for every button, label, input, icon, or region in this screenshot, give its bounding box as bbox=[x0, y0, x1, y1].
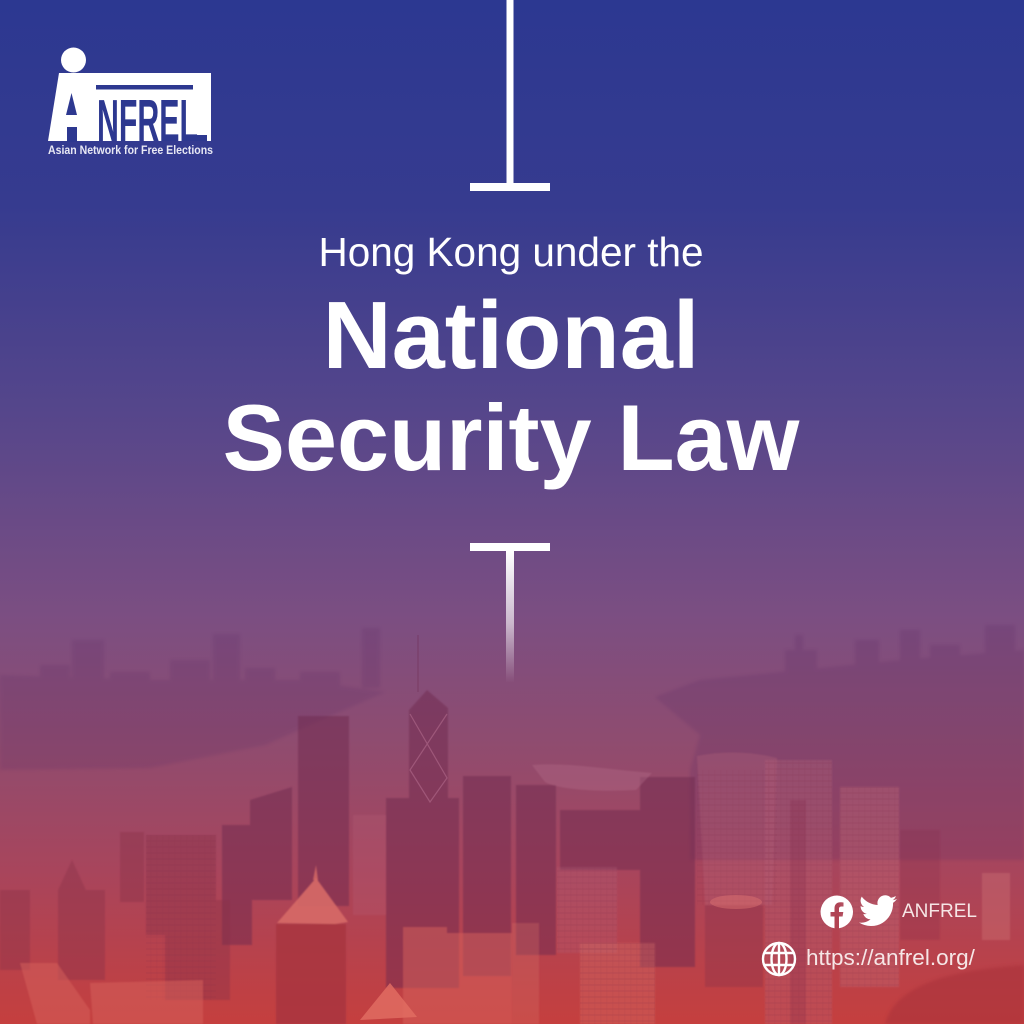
right hand residential towers bbox=[512, 752, 1010, 1024]
logo: ANFREL: Asian Network for Free Elections bbox=[48, 143, 213, 157]
title line 3: Security Law bbox=[223, 385, 799, 490]
social: twitter bird icon bbox=[859, 895, 897, 926]
pyramid roof building bbox=[276, 865, 348, 1024]
bottom vertical line with cap and fade bbox=[470, 543, 550, 678]
website url: https://anfrel.org/ bbox=[806, 945, 975, 970]
foreground pale rooftops bbox=[20, 927, 512, 1024]
far shore city right bbox=[655, 625, 1024, 860]
pale building, centre bbox=[353, 815, 386, 915]
top vertical line with cap bbox=[470, 0, 550, 191]
title line 1: Hong Kong under the bbox=[318, 229, 704, 275]
round tower roof bbox=[710, 895, 762, 909]
mid-ground buildings left bbox=[0, 832, 230, 1000]
logo: ANFREL bbox=[48, 48, 213, 157]
Bank of China mast bbox=[417, 635, 419, 692]
dark foliage bbox=[885, 965, 1024, 1024]
icon: globe bbox=[762, 942, 796, 976]
convention centre roof bbox=[532, 764, 652, 791]
window grid texture bbox=[146, 760, 899, 1024]
foreground pyramid roof bbox=[360, 983, 417, 1020]
far shore city left bbox=[0, 628, 385, 770]
social: ANFREL handle: ANFREL bbox=[902, 901, 977, 922]
title line 2: National bbox=[323, 283, 699, 389]
Bank of China cross bracing bbox=[410, 714, 447, 802]
central dark towers bbox=[222, 690, 695, 988]
social: facebook icon bbox=[820, 896, 853, 928]
